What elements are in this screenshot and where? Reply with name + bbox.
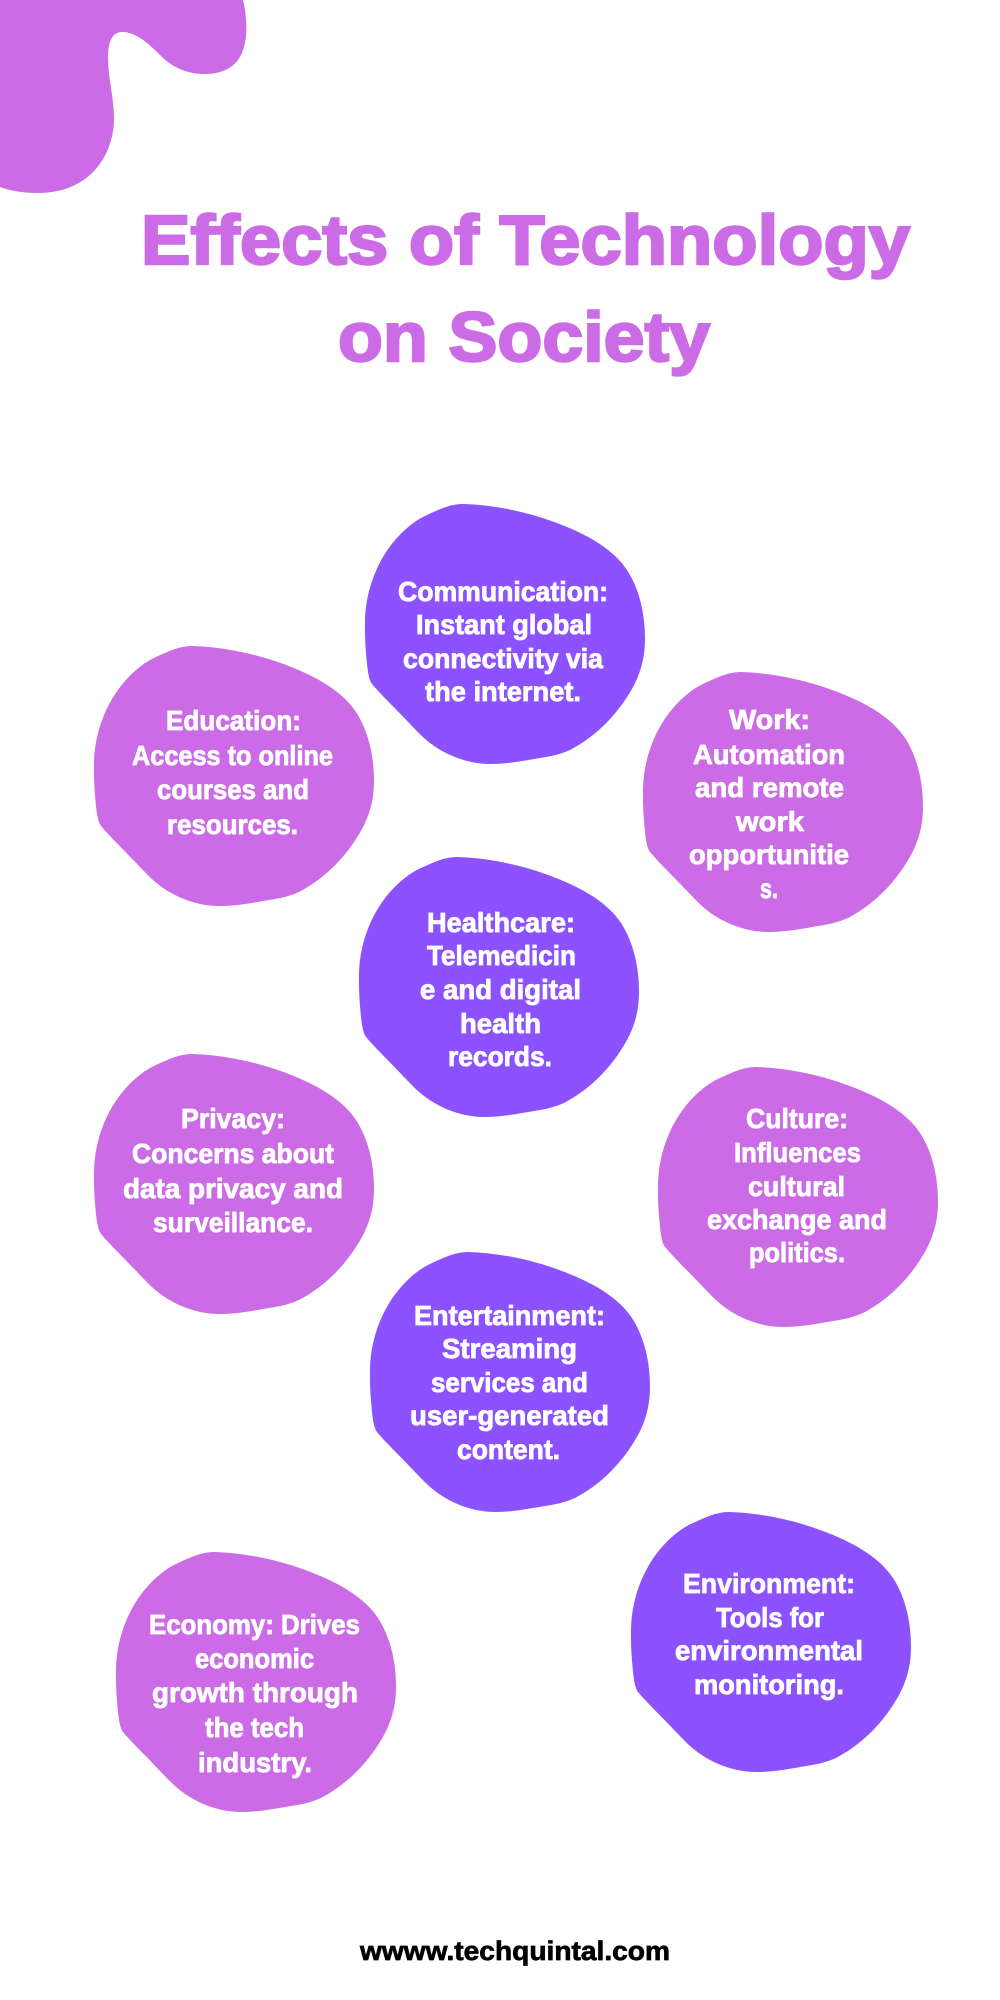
text: healthcare: records. <box>448 1041 552 1072</box>
panel: work <box>643 672 923 932</box>
title: Effects of Technology <box>141 201 910 279</box>
text: economy: growth through <box>152 1677 358 1708</box>
text: healthcare: Healthcare: <box>427 907 575 938</box>
text: culture: Influences <box>734 1137 861 1168</box>
text: culture: exchange and <box>707 1204 887 1235</box>
corner decorative blob <box>0 0 246 193</box>
text: environment: Tools for <box>716 1602 824 1633</box>
footer url: wwww.techquintal.com <box>359 1936 670 1966</box>
text: healthcare: Telemedicin <box>427 940 576 971</box>
text: communication: Instant global <box>416 609 592 640</box>
text: culture: cultural <box>748 1171 845 1202</box>
text: work: Automation <box>693 739 845 770</box>
text: healthcare: e and digital <box>420 974 581 1005</box>
text: privacy <box>123 1103 343 1238</box>
text: entertainment: Streaming <box>442 1333 577 1364</box>
panel: environment <box>631 1512 911 1772</box>
text: environment: Environment: <box>683 1568 855 1599</box>
text: education: Education: <box>166 705 301 736</box>
text: economy <box>149 1609 360 1778</box>
text: privacy: data privacy and <box>123 1173 343 1204</box>
text: economy: the tech <box>205 1712 304 1743</box>
panel: culture <box>658 1067 938 1327</box>
text: environment <box>675 1568 863 1700</box>
text: education: resources. <box>167 809 298 840</box>
panel: communication <box>365 504 645 764</box>
text: education: courses and <box>157 774 309 805</box>
text: work: Work: <box>729 704 810 735</box>
panel: education <box>94 646 374 906</box>
text: work: opportunitie <box>689 839 849 870</box>
text: environment: monitoring. <box>694 1669 844 1700</box>
panel: privacy <box>94 1054 374 1314</box>
text: education: Access to online <box>132 740 333 771</box>
text: entertainment: content. <box>457 1434 560 1465</box>
text: healthcare <box>420 907 581 1072</box>
text: privacy: surveillance. <box>153 1207 313 1238</box>
text: communication: connectivity via <box>403 643 603 674</box>
text: culture: Culture: <box>746 1103 848 1134</box>
text: education <box>132 705 333 840</box>
text: work: s. <box>760 873 778 904</box>
panel: healthcare <box>359 857 639 1117</box>
text: economy: industry. <box>198 1747 312 1778</box>
text: environment: environmental <box>675 1635 863 1666</box>
text: communication: the internet. <box>425 676 581 707</box>
panel: entertainment <box>370 1252 650 1512</box>
title: on Society <box>338 298 710 376</box>
text: entertainment <box>410 1300 609 1465</box>
text: entertainment: services and <box>431 1367 588 1398</box>
text: healthcare: health <box>460 1008 541 1039</box>
text: privacy: Concerns about <box>132 1138 334 1169</box>
text: entertainment: user-generated <box>410 1400 609 1431</box>
title <box>141 201 910 376</box>
text: entertainment: Entertainment: <box>414 1300 605 1331</box>
text: culture: politics. <box>749 1237 845 1268</box>
text: economy: Economy: Drives <box>149 1609 360 1640</box>
text: economy: economic <box>195 1643 314 1674</box>
text: privacy: Privacy: <box>181 1103 285 1134</box>
text: communication: Communication: <box>398 576 608 607</box>
text: work: and remote <box>695 772 844 803</box>
text: work: work <box>735 806 804 837</box>
text: work <box>689 704 849 904</box>
text: culture <box>707 1103 887 1268</box>
text: communication <box>398 576 608 707</box>
panel: economy <box>116 1552 396 1812</box>
